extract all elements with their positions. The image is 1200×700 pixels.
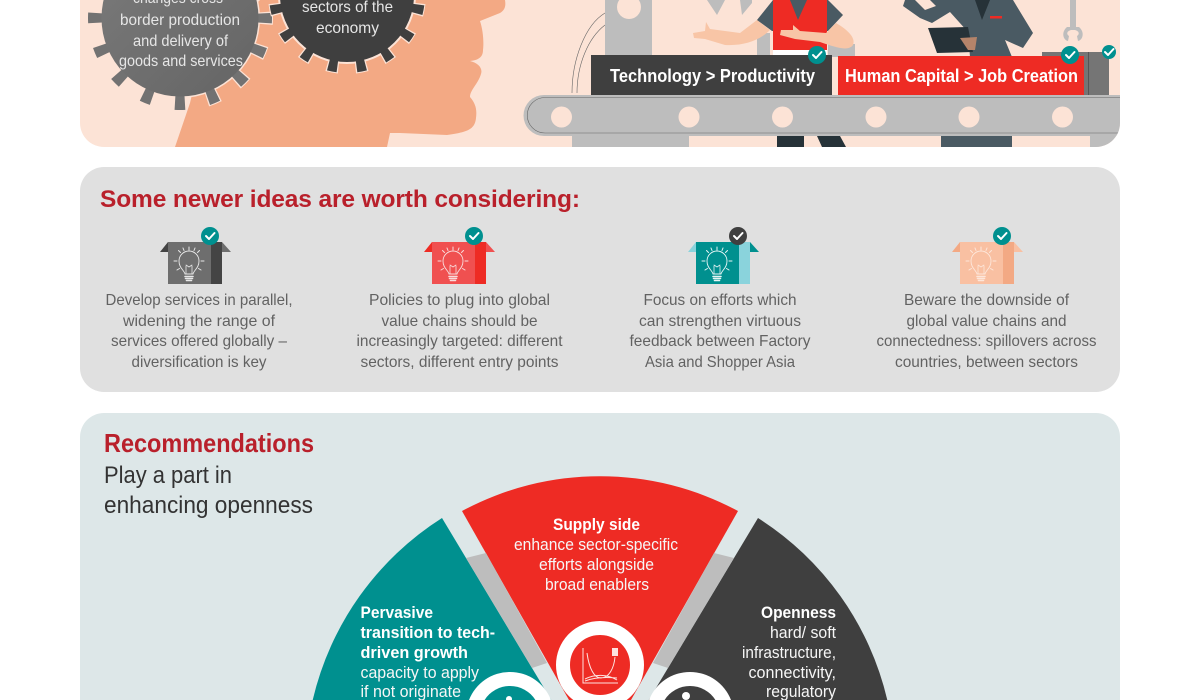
idea 2: value chains should be: [382, 313, 538, 330]
idea 3: feedback between Factory: [630, 333, 810, 350]
idea 2: [356, 227, 563, 371]
idea 3: Asia and Shopper Asia: [645, 354, 795, 371]
worker legs: [777, 136, 1012, 147]
idea 3: Focus on efforts which: [644, 292, 796, 309]
panel: technology and human capital: [80, 0, 1120, 147]
wheel segment: red supply side: Supply side: [553, 515, 640, 534]
heading: Recommendations: [104, 428, 314, 458]
idea 1: services offered globally –: [111, 333, 287, 350]
wheel segment: teal pervasive transition: [313, 518, 551, 700]
icon: dark badge: [649, 672, 731, 700]
idea 2: increasingly targeted: different: [356, 333, 563, 350]
banner: technology: [591, 55, 832, 95]
wheel segment: red supply side: efforts alongside: [539, 556, 654, 574]
idea 3: [630, 227, 810, 371]
subheading: [104, 462, 313, 519]
gear text: economy: [316, 20, 379, 37]
banner: technology: Technology > Productivity: [610, 65, 816, 86]
idea 1: diversification is key: [132, 354, 266, 371]
wheel segment: teal pervasive transition: transition to tech-: [360, 623, 495, 642]
idea 4: connectedness: spillovers across: [876, 333, 1096, 350]
robot wrench and box: [1042, 0, 1109, 96]
idea 3: can strengthen virtuous: [639, 313, 801, 330]
conveyor belt: [524, 95, 1120, 147]
wheel segment: dark openness: hard/ soft: [770, 624, 836, 642]
idea 4: countries, between sectors: [895, 354, 1078, 371]
idea 2: Policies to plug into global: [369, 292, 550, 309]
wheel segment: teal pervasive transition: capacity to apply: [360, 664, 480, 682]
banner: human capital: [838, 56, 1084, 95]
connector strips: [466, 553, 734, 668]
subheading: enhancing openness: [104, 492, 313, 519]
icon: teal badge: [469, 672, 551, 700]
idea 1: widening the range of: [122, 313, 276, 330]
check badges: [808, 45, 1116, 64]
wheel segment: red supply side: broad enablers: [545, 576, 649, 594]
wheel segment: dark openness: Openness: [761, 603, 836, 622]
heading: Some newer ideas are worth considering:: [100, 186, 580, 213]
panel: newer ideas: [80, 167, 1120, 392]
wheel segment: dark openness: [649, 518, 887, 700]
idea 4: Beware the downside of: [904, 292, 1070, 309]
gear: dark sectors of the economy: [275, 0, 419, 67]
gear: grey cross-border production: [95, 0, 265, 103]
wheel segment: dark openness: infrastructure,: [742, 644, 836, 662]
gear text: and delivery of: [133, 33, 229, 50]
gear text: [302, 0, 393, 37]
worker: man with tablet: [903, 0, 1033, 57]
head silhouette: [175, 0, 505, 147]
wheel segment: dark openness: connectivity,: [748, 664, 836, 682]
wheel segment: teal pervasive transition: driven growth: [360, 643, 468, 662]
wheel segment: teal pervasive transition: Pervasive: [360, 603, 433, 622]
idea 2: sectors, different entry points: [360, 354, 558, 371]
subheading: Play a part in: [104, 462, 232, 489]
icon: supply curve badge: [563, 628, 637, 700]
panel: recommendations: [80, 413, 1120, 700]
worker: woman in red vest: [693, 0, 855, 57]
wheel segment: red supply side: [462, 476, 738, 700]
gear text: border production: [120, 12, 240, 29]
gear text: goods and services: [119, 53, 243, 70]
idea 4: [876, 227, 1096, 371]
idea 1: [106, 227, 292, 371]
robot arm: [572, 0, 652, 93]
wheel segment: red supply side: enhance sector-specific: [514, 536, 678, 554]
idea 1: Develop services in parallel,: [106, 292, 292, 309]
gear text: [119, 0, 243, 70]
banner: human capital: Human Capital > Job Creation: [845, 65, 1078, 86]
idea 4: global value chains and: [906, 313, 1066, 330]
